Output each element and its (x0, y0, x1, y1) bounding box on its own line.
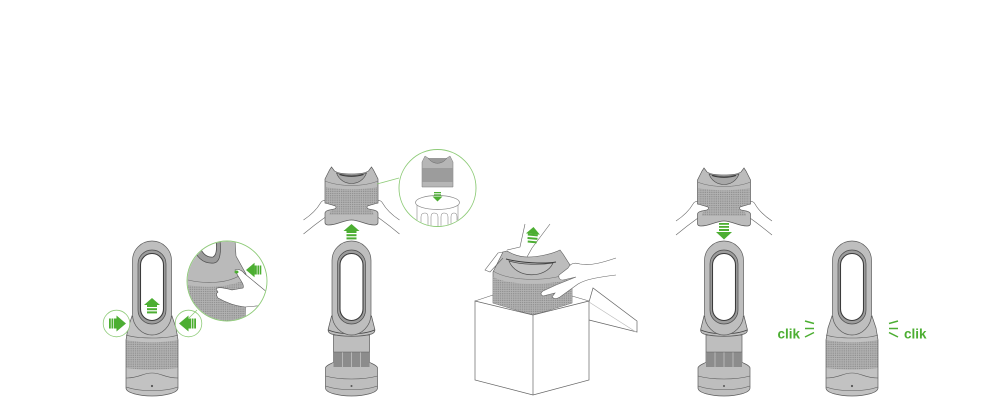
left hand (485, 224, 550, 272)
box flap (589, 288, 637, 332)
step 3: filter in the box (475, 224, 637, 395)
right click marks (889, 321, 898, 337)
fan with filter fitted, step 1 (126, 241, 178, 396)
connector to inset (377, 178, 399, 184)
fan with filter fitted, step 5 (826, 241, 878, 396)
filter going into box (493, 250, 572, 315)
hands holding filter (304, 201, 400, 234)
icon: down arrow (716, 223, 732, 240)
step 1: release the filter (103, 240, 268, 396)
icon: up arrow (344, 224, 360, 239)
box (475, 301, 589, 395)
new filter (698, 168, 750, 226)
callout connector (189, 310, 197, 318)
icon: up arrow inside the loop (144, 298, 160, 313)
left click label: clik (778, 326, 801, 342)
fan without filter, step 2 (326, 241, 378, 396)
left click marks (805, 321, 814, 337)
right click label: clik (904, 326, 927, 342)
step 2: lift filter off the fan (304, 150, 476, 396)
right press callout (175, 310, 202, 337)
step 5: click into place (778, 241, 927, 396)
box back edges (475, 295, 589, 301)
filter removed (325, 167, 378, 225)
step 4: fit new filter (676, 168, 772, 396)
magnified callout: thumb pressing release button (185, 240, 268, 325)
fan without filter, step 4 (698, 241, 750, 396)
icon: up arrow (525, 226, 540, 244)
hands holding new filter (676, 202, 772, 235)
right hand (541, 258, 616, 298)
left press callout (103, 310, 130, 337)
inset: filter placed into packaging (399, 150, 476, 230)
